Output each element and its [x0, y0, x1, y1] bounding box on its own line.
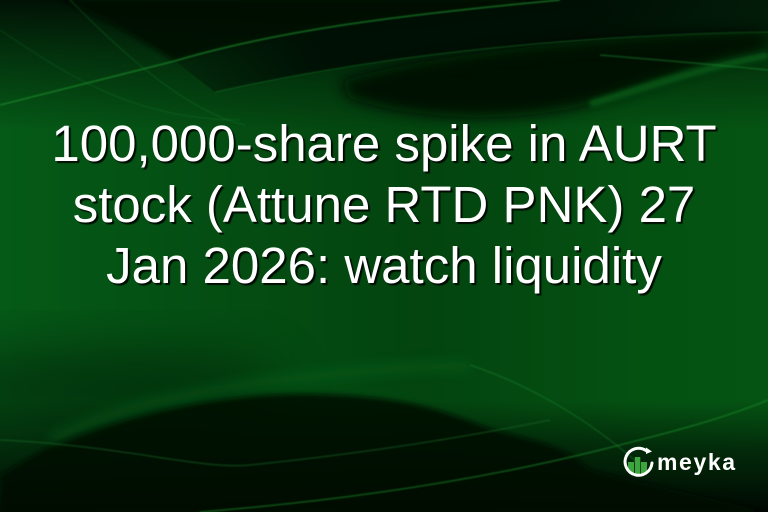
title: stock (Attune RTD PNK) 27	[73, 176, 695, 233]
bottom shading	[0, 400, 768, 512]
title: 100,000-share spike in AURT	[51, 115, 717, 172]
title	[51, 115, 718, 296]
title: Jan 2026: watch liquidity	[106, 237, 662, 294]
dark band between arcs	[175, 0, 768, 92]
top dark swoosh above first arc	[60, 0, 560, 61]
left dark zone	[0, 350, 280, 430]
logo: meyka	[624, 446, 737, 477]
top shading	[0, 0, 768, 130]
bottom dark blob	[0, 394, 768, 512]
logo: meyka: meyka	[657, 449, 737, 475]
wave lines	[0, 420, 550, 466]
dark blob under second arc	[340, 32, 768, 117]
